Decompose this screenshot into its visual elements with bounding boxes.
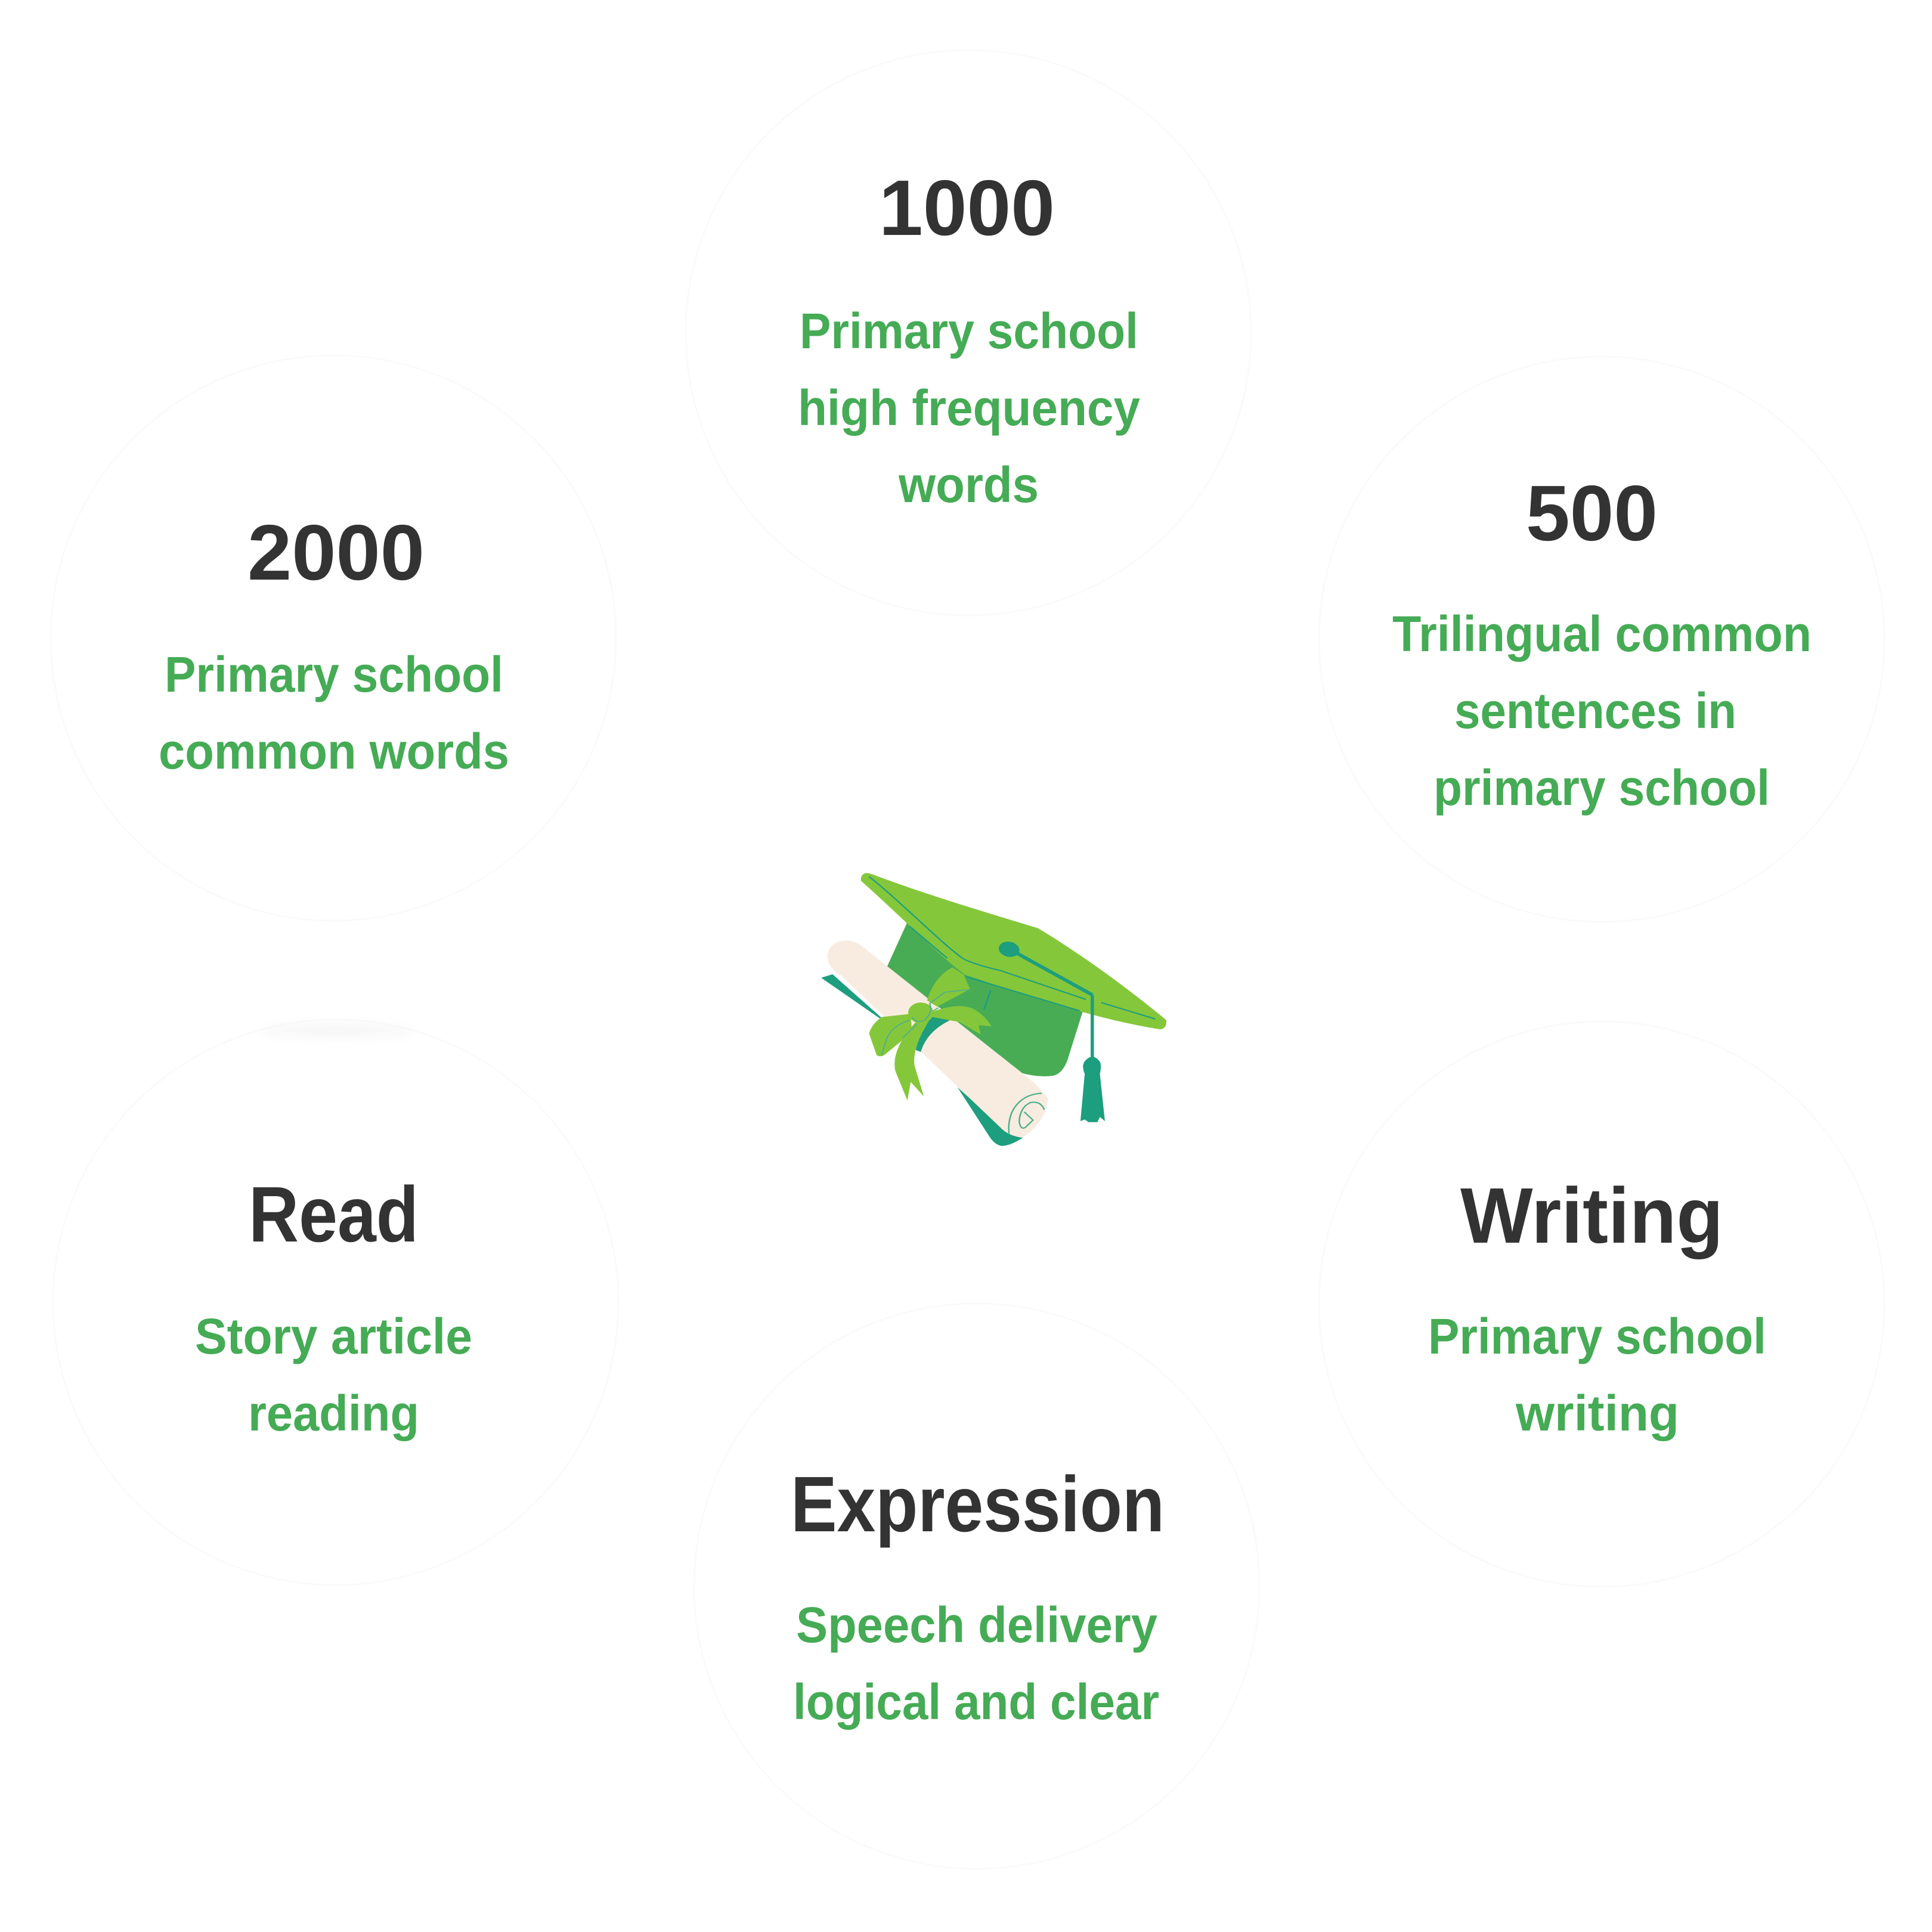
diploma scroll <box>827 940 1048 1138</box>
description: writing <box>1515 1385 1679 1441</box>
number: 2000: 2000 <box>247 509 425 596</box>
panel: 1000 high frequency words <box>686 50 1251 615</box>
heading: Writing: Writing <box>1460 1172 1723 1259</box>
panel: Read <box>53 1020 618 1585</box>
tassel <box>1080 1056 1105 1122</box>
panel: 500 trilingual sentences <box>1319 357 1884 922</box>
icon: graduation cap and diploma scroll <box>821 873 1166 1146</box>
scroll end curl <box>1009 1093 1044 1134</box>
heading: Read: Read <box>249 1171 419 1258</box>
description: Primary school <box>1428 1308 1766 1364</box>
description: reading <box>248 1385 419 1441</box>
description: logical and clear <box>793 1674 1159 1730</box>
description: Story article <box>195 1308 472 1364</box>
description: Primary school <box>165 646 503 702</box>
panel: Writing <box>1319 1021 1884 1587</box>
description <box>195 1308 472 1441</box>
circle <box>53 1020 618 1585</box>
panel: Expression <box>694 1304 1259 1869</box>
description: high frequency <box>798 380 1140 436</box>
circle <box>1319 1021 1884 1587</box>
cord button <box>996 939 1023 959</box>
description <box>1392 606 1812 816</box>
description: Primary school <box>800 303 1138 359</box>
number: 500: 500 <box>1526 469 1658 557</box>
description <box>798 303 1140 513</box>
panel: 2000 common words <box>51 355 616 921</box>
heading: Expression: Expression <box>791 1460 1165 1548</box>
tassel cord, lower <box>1088 995 1096 1059</box>
ribbon band <box>916 1017 953 1052</box>
description: sentences in <box>1454 683 1736 739</box>
description: common words <box>159 723 509 779</box>
circle <box>686 50 1251 615</box>
diploma back sheet, upper <box>821 974 883 1019</box>
description: Trilingual common <box>1392 606 1812 662</box>
description: primary school <box>1433 760 1770 816</box>
ribbon detail lines <box>882 989 970 1055</box>
cap base <box>887 923 1083 1076</box>
cap board <box>861 873 1166 1029</box>
ribbon bow <box>869 967 992 1101</box>
tassel cord, upper <box>1009 949 1092 995</box>
description <box>793 1597 1159 1730</box>
number: 1000: 1000 <box>879 164 1055 252</box>
description <box>159 646 509 779</box>
diploma back sheet, lower <box>957 1087 1023 1146</box>
description: words <box>898 457 1039 513</box>
description <box>1428 1308 1766 1441</box>
shadow smudge at top of the Read circle <box>259 1026 414 1036</box>
circle <box>694 1304 1259 1869</box>
cap board seam lines <box>869 877 1156 1019</box>
circle <box>1319 357 1884 922</box>
circle <box>51 355 616 921</box>
description: Speech delivery <box>796 1597 1157 1653</box>
